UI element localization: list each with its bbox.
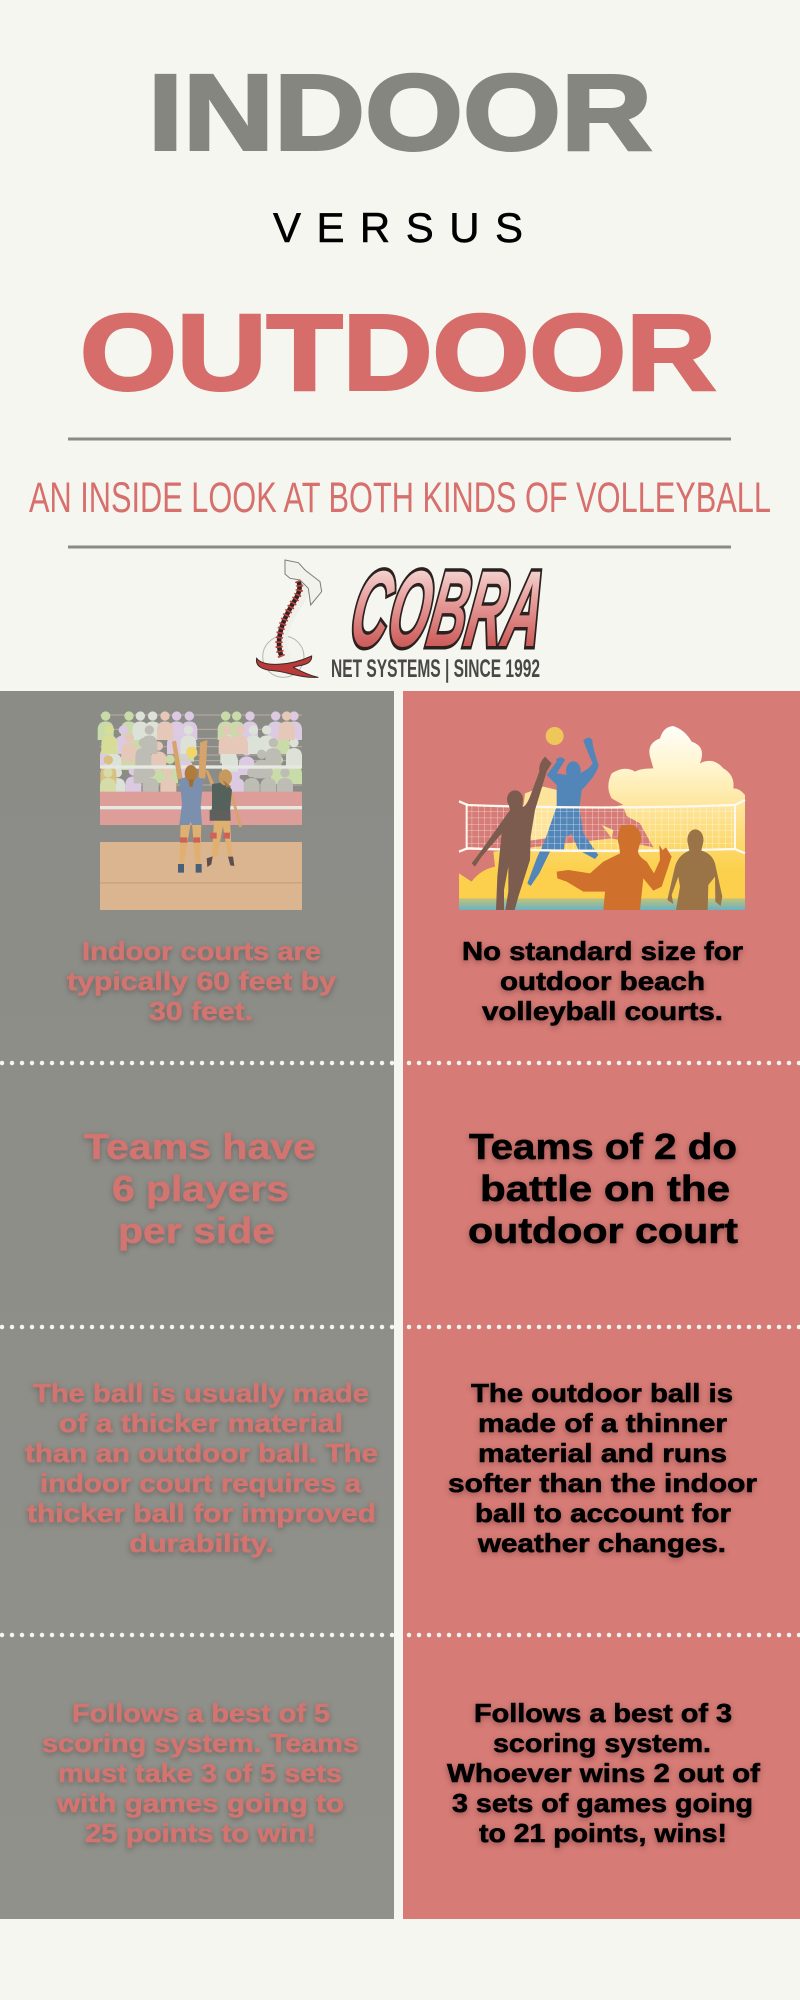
divider dots: row 1 [2, 1061, 394, 1065]
text: outdoor scoring: Follows a best of 3 [474, 1698, 732, 1728]
text: indoor court size: Indoor courts are [82, 936, 321, 966]
panel: indoor [0, 691, 394, 1919]
text: outdoor scoring: Whoever wins 2 out of [447, 1758, 760, 1788]
text: outdoor ball: softer than the indoor [448, 1468, 757, 1498]
divider dots: row 3 [2, 1633, 394, 1637]
text: indoor ball: indoor court requires a [40, 1468, 362, 1498]
text: indoor ball: The ball is usually made [33, 1378, 369, 1408]
text: outdoor scoring [447, 1698, 760, 1848]
title: INDOOR: INDOOR [148, 52, 652, 172]
text: indoor ball: durability. [129, 1528, 274, 1558]
divider dots: row 1 [409, 1061, 800, 1065]
tagline: NET SYSTEMS | SINCE 1992 [331, 655, 540, 683]
player: tan player [667, 829, 722, 910]
text: indoor ball: of a thicker material [59, 1408, 343, 1438]
player: blue kit [172, 740, 207, 873]
text: indoor team size: Teams have [84, 1126, 316, 1167]
text: indoor team size: 6 players [112, 1168, 289, 1209]
text: indoor ball [25, 1378, 378, 1558]
text: outdoor court size: volleyball courts. [482, 996, 723, 1026]
player: dark kit [206, 769, 242, 867]
text: outdoor ball: weather changes. [477, 1528, 726, 1558]
text: indoor court size: 30 feet. [149, 996, 253, 1026]
icon: beach ball [546, 727, 564, 745]
heading: VERSUS: VERSUS [273, 204, 523, 251]
text: outdoor team size [468, 1126, 738, 1251]
icon: volleyball [186, 747, 197, 758]
text: indoor scoring: must take 3 of 5 sets [58, 1758, 342, 1788]
text: indoor court size [67, 936, 337, 1026]
text: indoor scoring: with games going to [56, 1788, 344, 1818]
panel background: outdoor [403, 691, 800, 1919]
divider: above subtitle [68, 438, 731, 440]
text: indoor team size: per side [118, 1210, 275, 1251]
panel background: indoor [0, 691, 394, 1919]
logo: Cobra Net Systems [256, 549, 554, 683]
player: brown blocker [472, 757, 552, 910]
text: indoor scoring [42, 1698, 359, 1848]
player: orange player [557, 824, 672, 910]
text: outdoor ball: ball to account for [475, 1498, 731, 1528]
icon: cobra and volleyball [256, 560, 322, 677]
title: OUTDOOR: OUTDOOR [80, 292, 716, 412]
text: outdoor team size: battle on the [480, 1168, 730, 1209]
text: outdoor court size [462, 936, 743, 1026]
text: indoor court size: typically 60 feet by [67, 966, 337, 996]
text: outdoor ball: The outdoor ball is [471, 1378, 733, 1408]
panel: outdoor [403, 691, 800, 1919]
divider dots: row 3 [409, 1633, 800, 1637]
text: outdoor team size: Teams of 2 do [469, 1126, 737, 1167]
text: outdoor ball [448, 1378, 757, 1558]
text: outdoor court size: outdoor beach [500, 966, 705, 996]
text: outdoor scoring: scoring system. [493, 1728, 711, 1758]
text: indoor ball: than an outdoor ball. The [25, 1438, 378, 1468]
text: indoor scoring: 25 points to win! [85, 1818, 316, 1848]
text: indoor team size [84, 1126, 316, 1251]
text: outdoor ball: material and runs [478, 1438, 727, 1468]
net [459, 800, 745, 853]
text: outdoor scoring: 3 sets of games going [452, 1788, 753, 1818]
player: blue jumper [527, 738, 599, 886]
text: indoor scoring: scoring system. Teams [42, 1728, 359, 1758]
text: outdoor court size: No standard size for [462, 936, 743, 966]
text: indoor ball: thicker ball for improved [27, 1498, 376, 1528]
text: indoor scoring: Follows a best of 5 [72, 1698, 330, 1728]
divider dots: row 2 [409, 1325, 800, 1329]
divider: below subtitle [68, 546, 731, 548]
illustration: beach volleyball players [459, 726, 745, 910]
divider dots: row 2 [2, 1325, 394, 1329]
text: outdoor team size: outdoor court [468, 1210, 738, 1251]
text: outdoor scoring: to 21 points, wins! [479, 1818, 727, 1848]
wordmark: COBRA: COBRA [343, 549, 554, 670]
illustration: indoor players at the net [98, 711, 302, 910]
text: outdoor ball: made of a thinner [478, 1408, 727, 1438]
